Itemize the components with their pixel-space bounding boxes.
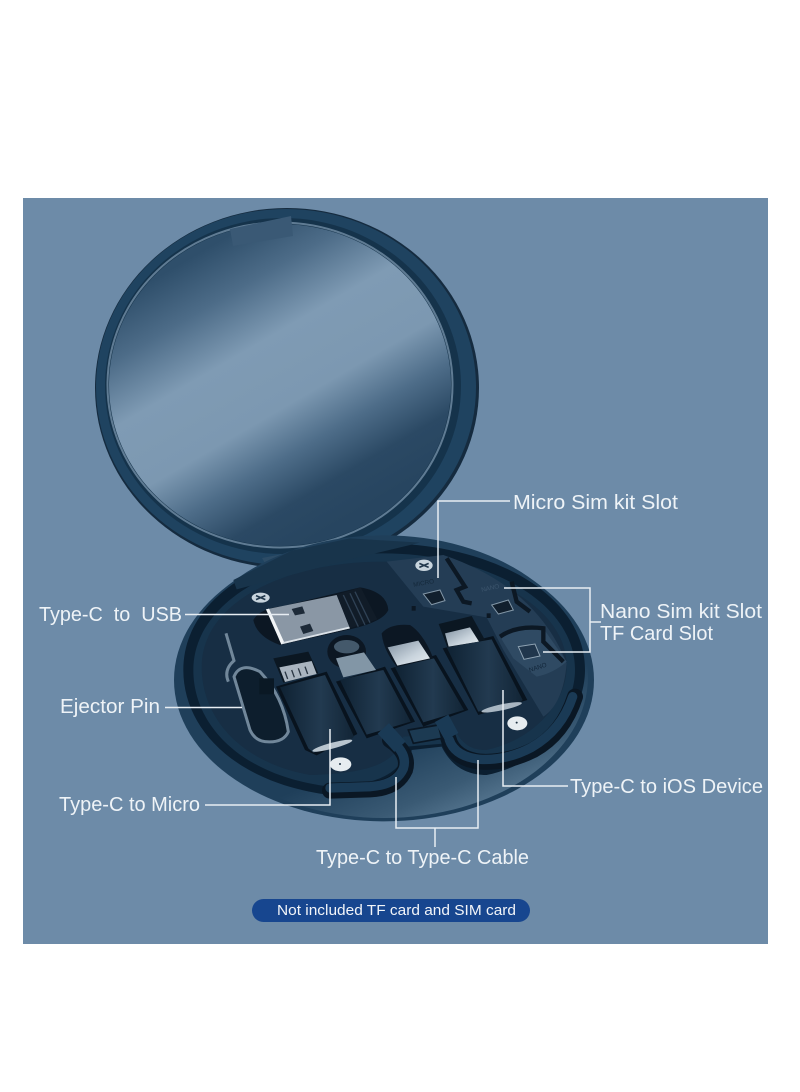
TF label: NANO	[528, 662, 548, 674]
screw right	[415, 560, 433, 571]
pin dot left	[330, 757, 351, 771]
dark rim ring	[183, 543, 585, 795]
micro SIM slot	[412, 558, 472, 611]
callout: not included note: Not included TF card and SIM card	[277, 903, 516, 919]
nano SIM slot	[487, 582, 530, 618]
label: Type-C to iOS Device: Type-C to iOS Device	[570, 776, 763, 798]
hinge plate	[233, 538, 420, 589]
label: Type-C to Micro: Type-C to Micro	[59, 794, 200, 816]
center clip	[408, 725, 442, 743]
rim ring light	[193, 553, 575, 787]
label: Type-C to Type-C Cable: Type-C to Type-C Cable	[316, 847, 529, 869]
nano SIM label: NANO	[481, 583, 500, 594]
label: Nano Sim kit Slot: Nano Sim kit Slot	[600, 600, 762, 623]
leader lines	[165, 501, 601, 847]
SIM tray panel	[387, 555, 567, 717]
connector: iOS	[439, 616, 523, 715]
USB recess	[253, 587, 388, 645]
label: Micro Sim kit Slot: Micro Sim kit Slot	[513, 491, 678, 514]
tray	[202, 562, 567, 775]
cable left	[330, 740, 406, 791]
hinge	[262, 541, 352, 572]
connector: USB-C right	[382, 625, 464, 722]
cable right	[448, 697, 575, 762]
label: Type-C to USB: Type-C to USB	[39, 604, 182, 626]
connector: micro USB	[273, 652, 354, 754]
case base with accessories	[174, 535, 594, 821]
lid of the case	[95, 208, 479, 568]
lower floor	[180, 535, 588, 818]
connector channels	[276, 636, 527, 755]
connector: USB-C left	[327, 635, 411, 735]
screw left	[252, 593, 270, 603]
label: Ejector Pin: Ejector Pin	[60, 696, 160, 718]
panel: background	[23, 198, 768, 944]
TF card slot	[500, 628, 567, 677]
connector necks	[383, 718, 452, 747]
callout: not included note	[252, 899, 530, 922]
ejector pin	[226, 633, 288, 742]
pin dot right	[507, 716, 527, 730]
USB plug	[266, 587, 377, 644]
base outer shell	[174, 539, 594, 821]
label: TF Card Slot: TF Card Slot	[600, 622, 713, 645]
micro SIM label: MICRO	[413, 578, 435, 589]
